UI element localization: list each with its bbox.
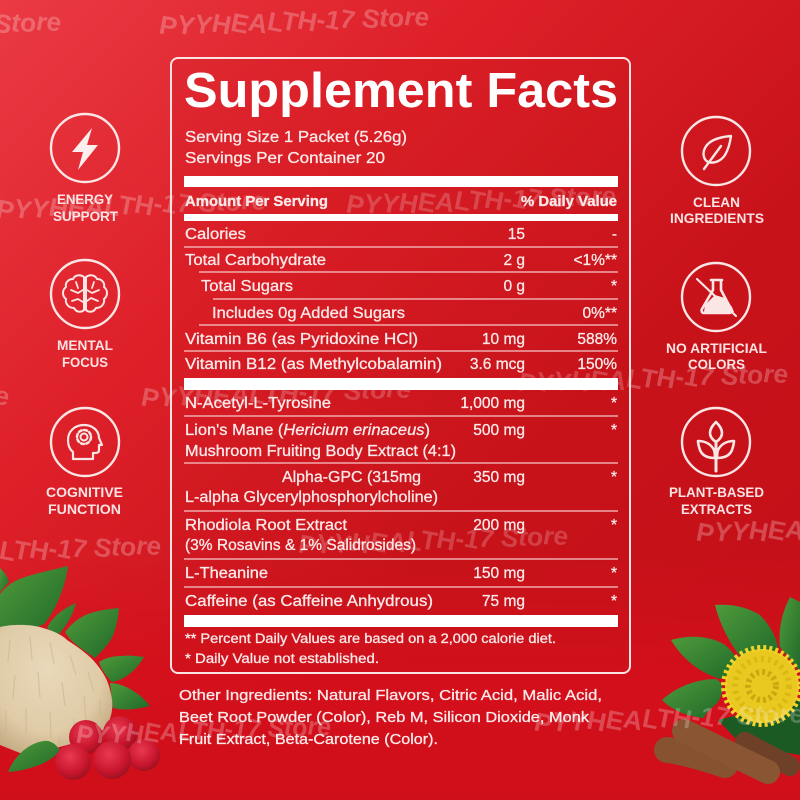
label: plant-based extracts: EXTRACTS [681, 502, 752, 517]
row: vitamin B12: 3.6 mcg [470, 356, 525, 373]
label: clean ingredients [670, 195, 764, 226]
badge: cognitive function [46, 408, 123, 517]
row: total carbohydrate: Total Carbohydrate [185, 252, 326, 269]
cranberries [55, 716, 160, 780]
watermarks: PYYHEALTH-17 Store [515, 357, 792, 400]
watermarks [0, 0, 800, 572]
row: total sugars [201, 278, 617, 295]
watermarks over illustrations: PYYHEALTH-17 Store [531, 697, 800, 740]
bark sticks [667, 731, 790, 772]
row: N-acetyl-L-tyrosine: 1,000 mg [460, 395, 525, 412]
serving information: Serving Size 1 Packet (5.26g) [185, 129, 407, 146]
row: vitamin B6: Vitamin B6 (as Pyridoxine HCl) [185, 331, 418, 348]
label: cognitive function: FUNCTION [48, 502, 121, 517]
icon: lightning bolt [51, 114, 119, 182]
row: vitamin B12: Vitamin B12 (as Methylcobalamin) [185, 356, 442, 373]
serving information: Servings Per Container 20 [185, 150, 385, 167]
label: clean ingredients: INGREDIENTS [670, 211, 764, 226]
row: calories [185, 226, 617, 243]
label: cognitive function: COGNITIVE [46, 485, 123, 500]
badge: plant-based extracts [669, 408, 764, 517]
row: alpha-GPC: L-alpha Glycerylphosphorylcholine) [185, 489, 438, 506]
row: rhodiola [185, 517, 617, 554]
other ingredients: Beet Root Powder (Color), Reb M, Silicon Dioxide, Monk [179, 710, 590, 726]
footnotes: ** Percent Daily Values are based on a 2,000 calorie diet. [185, 631, 556, 646]
row: alpha-GPC [185, 469, 617, 506]
badge: mental focus [51, 260, 119, 370]
column headers: % Daily Value [521, 194, 617, 210]
icon: sprout [682, 408, 750, 476]
watermarks: PYYHEALTH-17 Store [295, 519, 572, 562]
row: total carbohydrate: <1%** [573, 252, 617, 269]
row: alpha-GPC: 350 mg [473, 469, 525, 486]
yellow flower [724, 648, 800, 724]
row: caffeine [185, 593, 617, 610]
row: rhodiola: (3% Rosavins & 1% Salidrosides) [185, 537, 416, 554]
row: lion's mane: Lion's Mane ( Hericium erinaceus ) [185, 422, 430, 439]
badge: no artificial colors [666, 263, 767, 372]
row: total carbohydrate: 2 g [503, 252, 525, 269]
row: N-acetyl-L-tyrosine [185, 395, 617, 412]
label: no artificial colors [666, 341, 767, 372]
watermarks: PYYHEALTH-17 Store [138, 372, 415, 415]
label: no artificial colors: COLORS [688, 357, 745, 372]
label: mental focus: MENTAL [57, 338, 113, 353]
watermarks over illustrations [73, 697, 800, 752]
row: L-theanine: * [611, 565, 617, 582]
row: calories: Calories [185, 226, 246, 243]
row: calories: - [612, 226, 617, 243]
other ingredients: Fruit Extract, Beta-Carotene (Color). [179, 732, 438, 748]
label: plant-based extracts [669, 485, 764, 517]
row: lion's mane: 500 mg [473, 422, 525, 439]
label: energy support: SUPPORT [53, 209, 119, 224]
row: alpha-GPC: * [611, 469, 617, 486]
label: plant-based extracts: PLANT-BASED [669, 485, 764, 500]
row: total carbohydrate [185, 252, 617, 269]
label: cognitive function [46, 485, 123, 517]
label: mental focus [57, 338, 113, 370]
other ingredients: Other Ingredients: Natural Flavors, Citric Acid, Malic Acid, [179, 688, 602, 704]
row separators [184, 247, 618, 587]
row: caffeine: 75 mg [482, 593, 525, 610]
row: added sugars: Includes 0g Added Sugars [212, 305, 405, 322]
watermarks: PYYHEALTH-17 Store [0, 184, 270, 227]
label: energy support: ENERGY [57, 192, 113, 207]
row: calories: 15 [508, 226, 525, 243]
watermarks over illustrations: PYYHEALTH-17 Store [73, 710, 335, 752]
row: vitamin B6: 588% [577, 331, 617, 348]
row: N-acetyl-L-tyrosine: N-Acetyl-L-Tyrosine [185, 395, 331, 412]
row: total sugars: 0 g [503, 278, 525, 295]
row: total sugars: Total Sugars [201, 278, 293, 295]
label: energy support [53, 192, 119, 224]
column headers: Amount Per Serving [185, 194, 328, 210]
row: caffeine: * [611, 593, 617, 610]
green leaves behind flower [662, 597, 800, 755]
row: N-acetyl-L-tyrosine: * [611, 395, 617, 412]
lower background shelf [0, 560, 800, 800]
row: vitamin B12: 150% [577, 356, 617, 373]
column headers [185, 194, 617, 210]
lion's mane mushroom [0, 625, 112, 753]
icon: crossed-out flask [682, 263, 750, 331]
row: L-theanine: 150 mg [473, 565, 525, 582]
footnotes: * Daily Value not established. [185, 651, 379, 666]
row: caffeine: Caffeine (as Caffeine Anhydrous) [185, 593, 433, 610]
title: Supplement Facts [184, 64, 618, 118]
row: vitamin B6 [185, 331, 617, 348]
label: clean ingredients: CLEAN [693, 195, 740, 210]
row: lion's mane: Mushroom Fruiting Body Extract (4:1) [185, 443, 456, 460]
row: rhodiola: Rhodiola Root Extract [185, 517, 348, 534]
nutrition rows [185, 226, 617, 610]
illustration: rhodiola flower and bark [662, 597, 800, 772]
illustration: lion's mane and berries [0, 566, 160, 780]
row: L-theanine [185, 565, 617, 582]
thick divider bars [184, 176, 618, 627]
other ingredients [179, 688, 602, 748]
panel: supplement facts [171, 58, 630, 673]
green leaves behind mushroom [0, 566, 150, 709]
icon: leaf [682, 117, 750, 185]
row: rhodiola: * [611, 517, 617, 534]
badge: energy support [51, 114, 119, 224]
icon: head with gear [51, 408, 119, 476]
row: added sugars: 0%** [583, 305, 617, 322]
label: no artificial colors: NO ARTIFICIAL [666, 341, 767, 356]
icon: brain [51, 260, 119, 328]
row: total sugars: * [611, 278, 617, 295]
watermarks: PYYHEALTH-17 Store [343, 179, 620, 222]
row: lion's mane [185, 422, 617, 460]
label: mental focus: FOCUS [62, 355, 108, 370]
row: rhodiola: 200 mg [473, 517, 525, 534]
row: added sugars [212, 305, 617, 322]
row: vitamin B12 [185, 356, 617, 373]
small leaf [8, 741, 60, 772]
row: alpha-GPC: Alpha-GPC (315mg [282, 469, 421, 486]
row: vitamin B6: 10 mg [482, 331, 525, 348]
footnotes [185, 631, 556, 666]
row: lion's mane: * [611, 422, 617, 439]
serving information [185, 129, 407, 167]
row: L-theanine: L-Theanine [185, 565, 268, 582]
watermarks: PYYHEALTH-17 Store [156, 0, 433, 43]
badge: clean ingredients [670, 117, 764, 226]
